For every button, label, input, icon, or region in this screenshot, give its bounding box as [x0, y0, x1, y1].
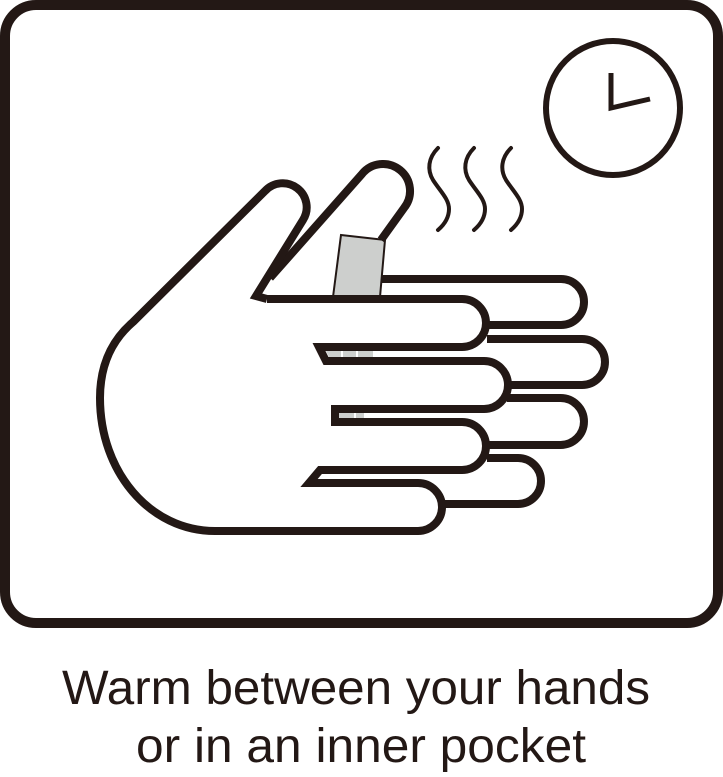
heat waves: [429, 148, 522, 230]
caption line two: or in an inner pocket: [136, 720, 586, 773]
icon: warming hands: [100, 148, 605, 531]
icon: clock: [546, 41, 680, 175]
front hand outline: [100, 183, 508, 531]
clock hands: [611, 73, 650, 108]
icon frame: [5, 5, 718, 623]
caption: Warm between your hands: [62, 662, 650, 715]
second finger raised over card: [270, 164, 410, 278]
back hand fingers: [382, 279, 605, 504]
card visible through finger gaps: [326, 351, 373, 419]
warmed card: [333, 235, 385, 297]
